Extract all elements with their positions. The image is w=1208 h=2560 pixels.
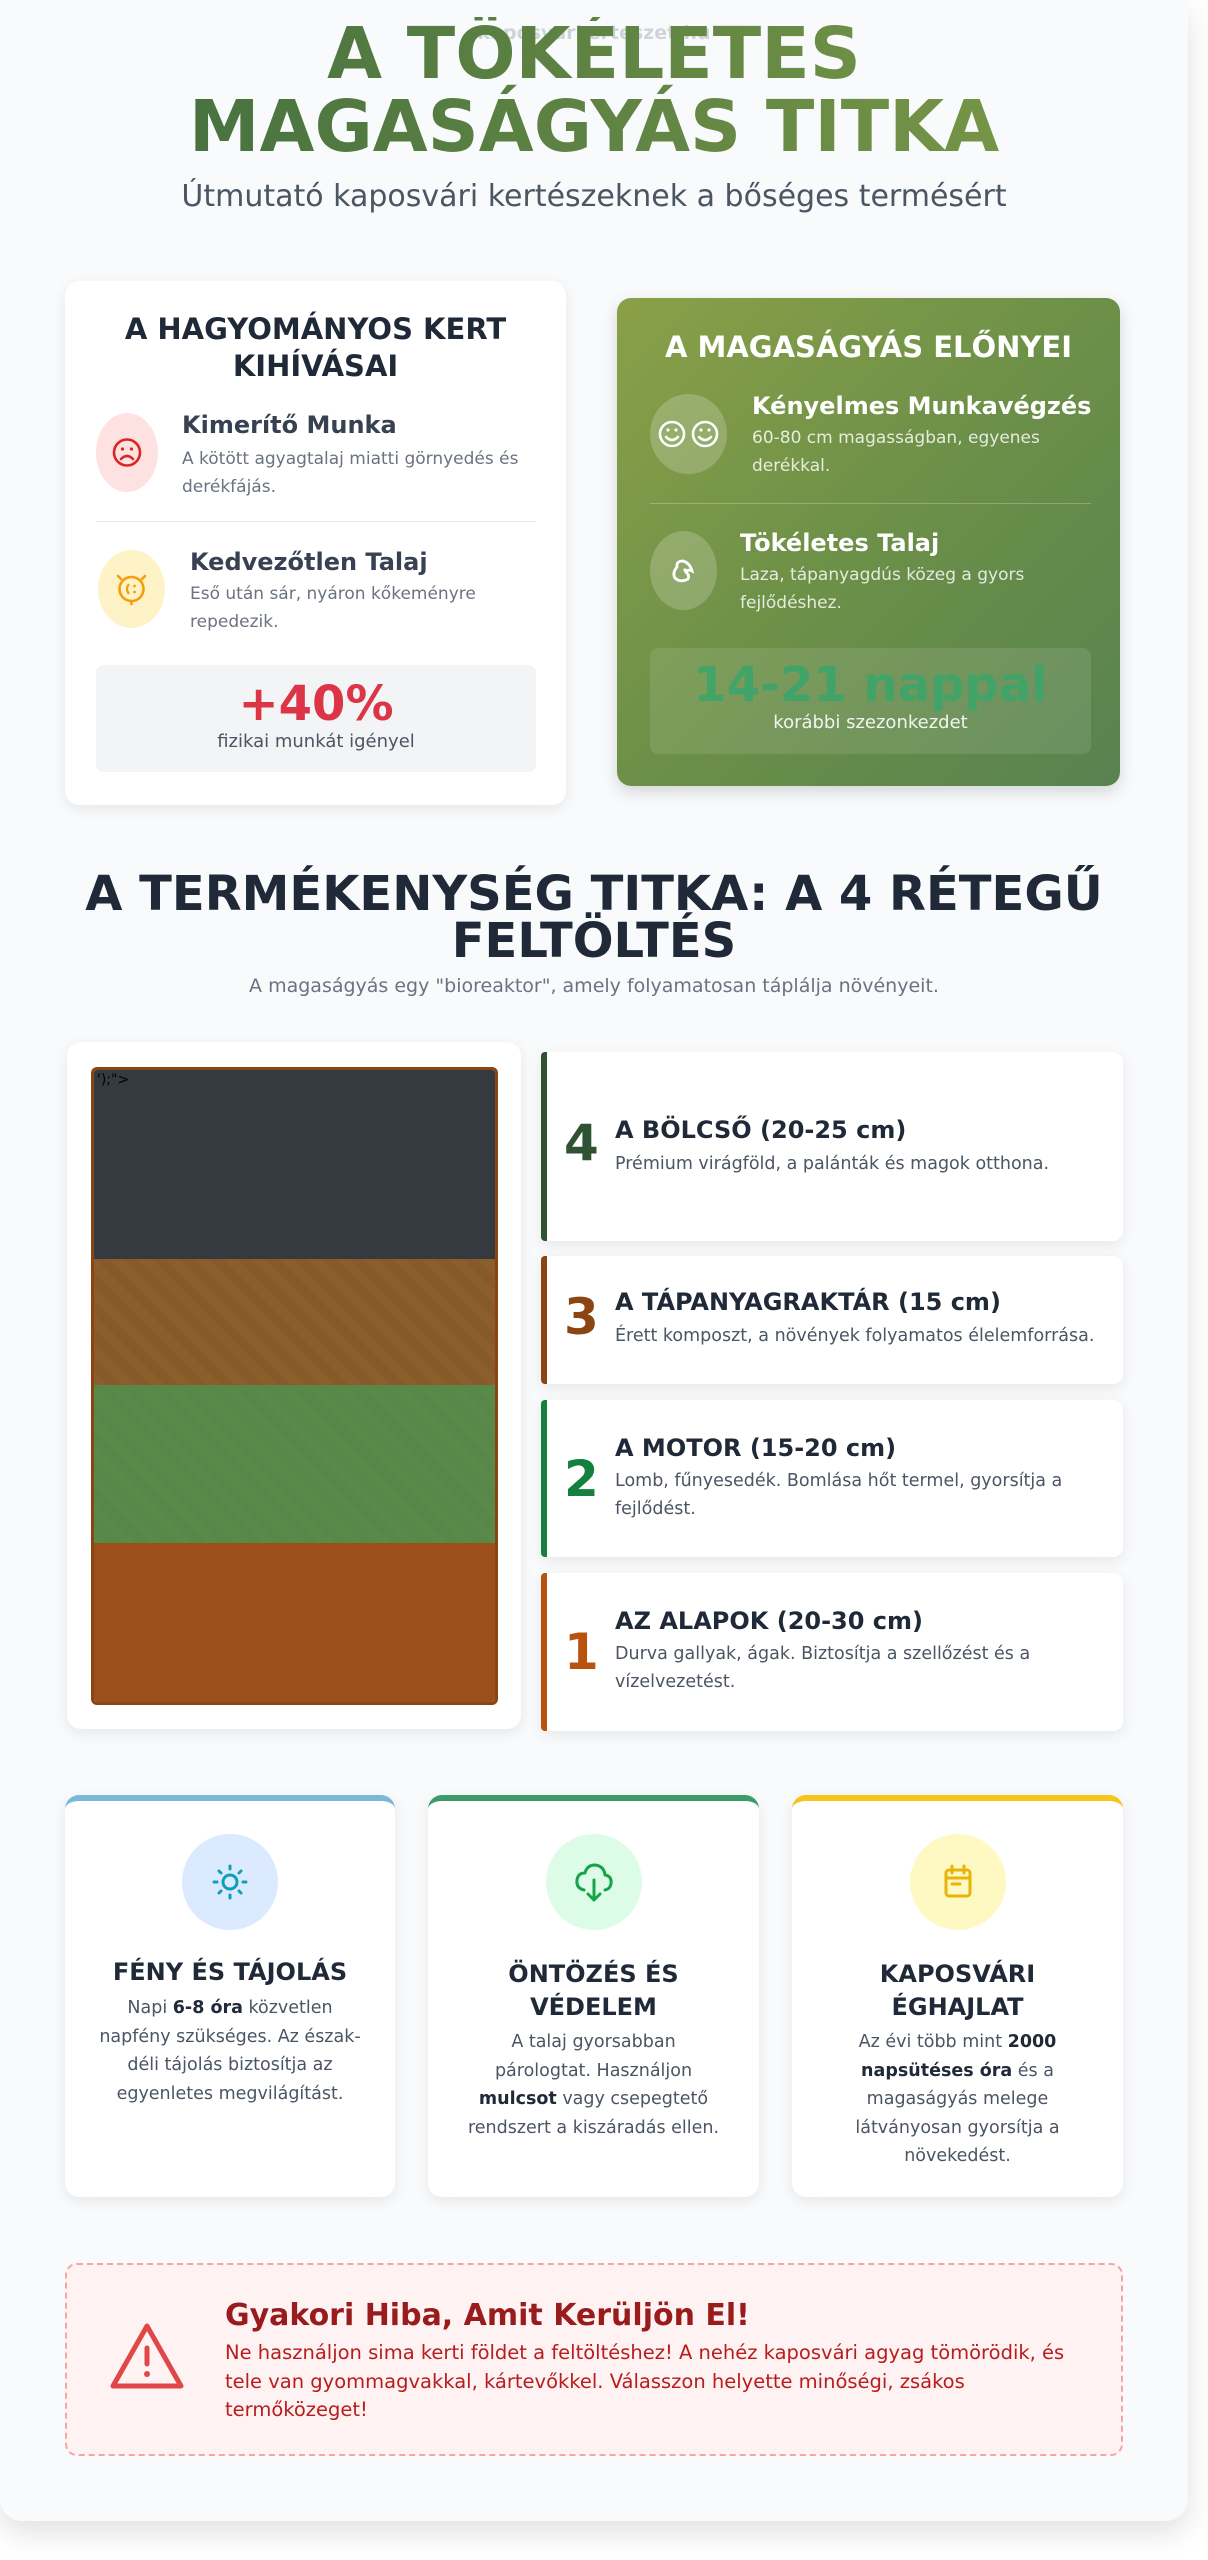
item: exhausting work: A kötött agyagtalaj miatti görnyedés és derékfájás. — [182, 449, 518, 497]
icon: cloud download — [546, 1834, 642, 1930]
layer card 2 — [541, 1400, 1123, 1557]
callout: common mistake warning: Gyakori Hiba, Amit Kerüljön El! — [225, 2298, 750, 2333]
layer card 3: 3 — [564, 1288, 599, 1346]
layer card 3: A TÁPANYAGRAKTÁR (15 cm) — [615, 1288, 1001, 1316]
callout: common mistake warning — [65, 2263, 1123, 2456]
layer card 2: 2 — [564, 1450, 599, 1508]
icon: sun/soil — [98, 550, 165, 628]
item: perfect soil — [650, 529, 1024, 613]
item: comfortable work: 60-80 cm magasságban, egyenes derékkal. — [752, 428, 1040, 476]
stat: 14-21 days: korábbi szezonkezdet — [773, 712, 968, 733]
diagram: raised bed layers — [91, 1067, 498, 1705]
section subtitle: A magaságyás egy "bioreaktor", amely folyamatosan táplálja növényeit. — [249, 975, 939, 997]
diagram: raised bed layers: ');"> — [97, 1072, 129, 1088]
title: MAGASÁGYÁS TITKA — [189, 85, 999, 168]
stat: 14-21 days: 14-21 nappal — [693, 657, 1048, 713]
heading: KIHÍVÁSAI — [233, 349, 398, 383]
panel: Kaposvár climate: Az évi több mint 2000 napsütéses óra és a magaságyás melege látványosan gyorsítja a növekedést. — [855, 2032, 1060, 2166]
section heading: 4 layers: FELTÖLTÉS — [452, 913, 736, 969]
item: poor soil: Kedvezőtlen Talaj — [190, 548, 428, 576]
layer card 3: Érett komposzt, a növények folyamatos élelemforrása. — [615, 1326, 1094, 1346]
panel: watering & protection — [428, 1795, 759, 2197]
section heading: 4 layers — [85, 865, 1103, 969]
title — [0, 17, 1188, 163]
icon: smileys — [650, 394, 727, 474]
layer card 2: A MOTOR (15-20 cm) — [615, 1434, 896, 1462]
layer card 1: 1 — [564, 1623, 599, 1681]
panel: raised bed advantages — [617, 298, 1120, 786]
panel: watering & protection: mulcsot vagy csepegtető — [479, 2089, 708, 2109]
stat: +40% — [96, 665, 536, 772]
panel: light & orientation — [65, 1795, 395, 2197]
item: perfect soil: Laza, tápanyagdús közeg a gyors fejlődéshez. — [740, 565, 1024, 613]
panel: Kaposvár climate — [792, 1795, 1123, 2197]
icon: warning triangle — [110, 2324, 184, 2388]
panel: light & orientation: FÉNY ÉS TÁJOLÁS — [113, 1958, 347, 1986]
section heading: 4 layers: A TERMÉKENYSÉG TITKA: A 4 RÉTEGŰ — [85, 866, 1103, 922]
icon: calendar — [910, 1834, 1006, 1930]
layer card 4: A BÖLCSŐ (20-25 cm) — [615, 1116, 906, 1144]
panel: watering & protection: VÉDELEM — [530, 1993, 657, 2021]
icon: sun — [182, 1834, 278, 1930]
stat: +40%: +40% — [238, 676, 394, 732]
item: poor soil: Eső után sár, nyáron kőkeményre repedezik. — [190, 584, 476, 632]
panel: Kaposvár climate: ÉGHAJLAT — [891, 1993, 1024, 2021]
title: A TÖKÉLETES — [327, 12, 861, 95]
stat: +40%: fizikai munkát igényel — [217, 731, 415, 752]
panel: Kaposvár climate: KAPOSVÁRI — [880, 1960, 1035, 1988]
layer card 4 — [541, 1052, 1123, 1241]
icon: seedling — [650, 531, 717, 610]
panel: watering & protection: párologtat. Használjon — [495, 2060, 692, 2080]
panel: layer diagram — [67, 1042, 521, 1729]
item: perfect soil: Tökéletes Talaj — [740, 529, 939, 557]
item: comfortable work: Kényelmes Munkavégzés — [752, 392, 1091, 420]
item: poor soil — [98, 548, 476, 632]
layer card 1 — [541, 1573, 1123, 1731]
layer card 3 — [541, 1256, 1123, 1384]
item: exhausting work: Kimerítő Munka — [182, 411, 397, 439]
panel: watering & protection: rendszert a kiszáradás ellen. — [468, 2118, 719, 2138]
heading: A HAGYOMÁNYOS KERT — [125, 312, 506, 346]
panel: light & orientation: Napi 6-8 óra közvetlen napfény szükséges. Az észak-déli tájolás biztosítja az egyenletes megvilágítást. — [99, 1998, 361, 2104]
panel: watering & protection: A talaj gyorsabban — [511, 2032, 676, 2052]
item: exhausting work — [96, 411, 518, 497]
callout: common mistake warning: Ne használjon sima kerti földet a feltöltéshez! A nehéz kaposvári agyag tömörödik, és tele van gyommagvakkal, kártevőkkel. Válasszon helyette minőségi, zsákos termőközeget! — [225, 2341, 1064, 2421]
heading — [125, 312, 506, 383]
layer card 2: Lomb, fűnyesedék. Bomlása hőt termel, gyorsítja a fejlődést. — [615, 1471, 1062, 1519]
stat: 14-21 days — [650, 648, 1091, 754]
icon: sad face — [96, 413, 158, 492]
layer card 1: AZ ALAPOK (20-30 cm) — [615, 1607, 923, 1635]
heading: A MAGASÁGYÁS ELŐNYEI — [665, 330, 1072, 364]
panel: watering & protection: ÖNTÖZÉS ÉS — [508, 1960, 679, 1988]
layer card 1: Durva gallyak, ágak. Biztosítja a szellőzést és a vízelvezetést. — [615, 1644, 1030, 1692]
panel: traditional garden challenges — [65, 281, 566, 805]
layer card 4: 4 — [564, 1114, 599, 1172]
subtitle: Útmutató kaposvári kertészeknek a bőséges termésért — [181, 179, 1007, 214]
item: comfortable work — [650, 392, 1091, 476]
layer card 4: Prémium virágföld, a palánták és magok otthona. — [615, 1154, 1049, 1174]
watermark: kaposvarkerteszet.hu — [478, 22, 710, 44]
